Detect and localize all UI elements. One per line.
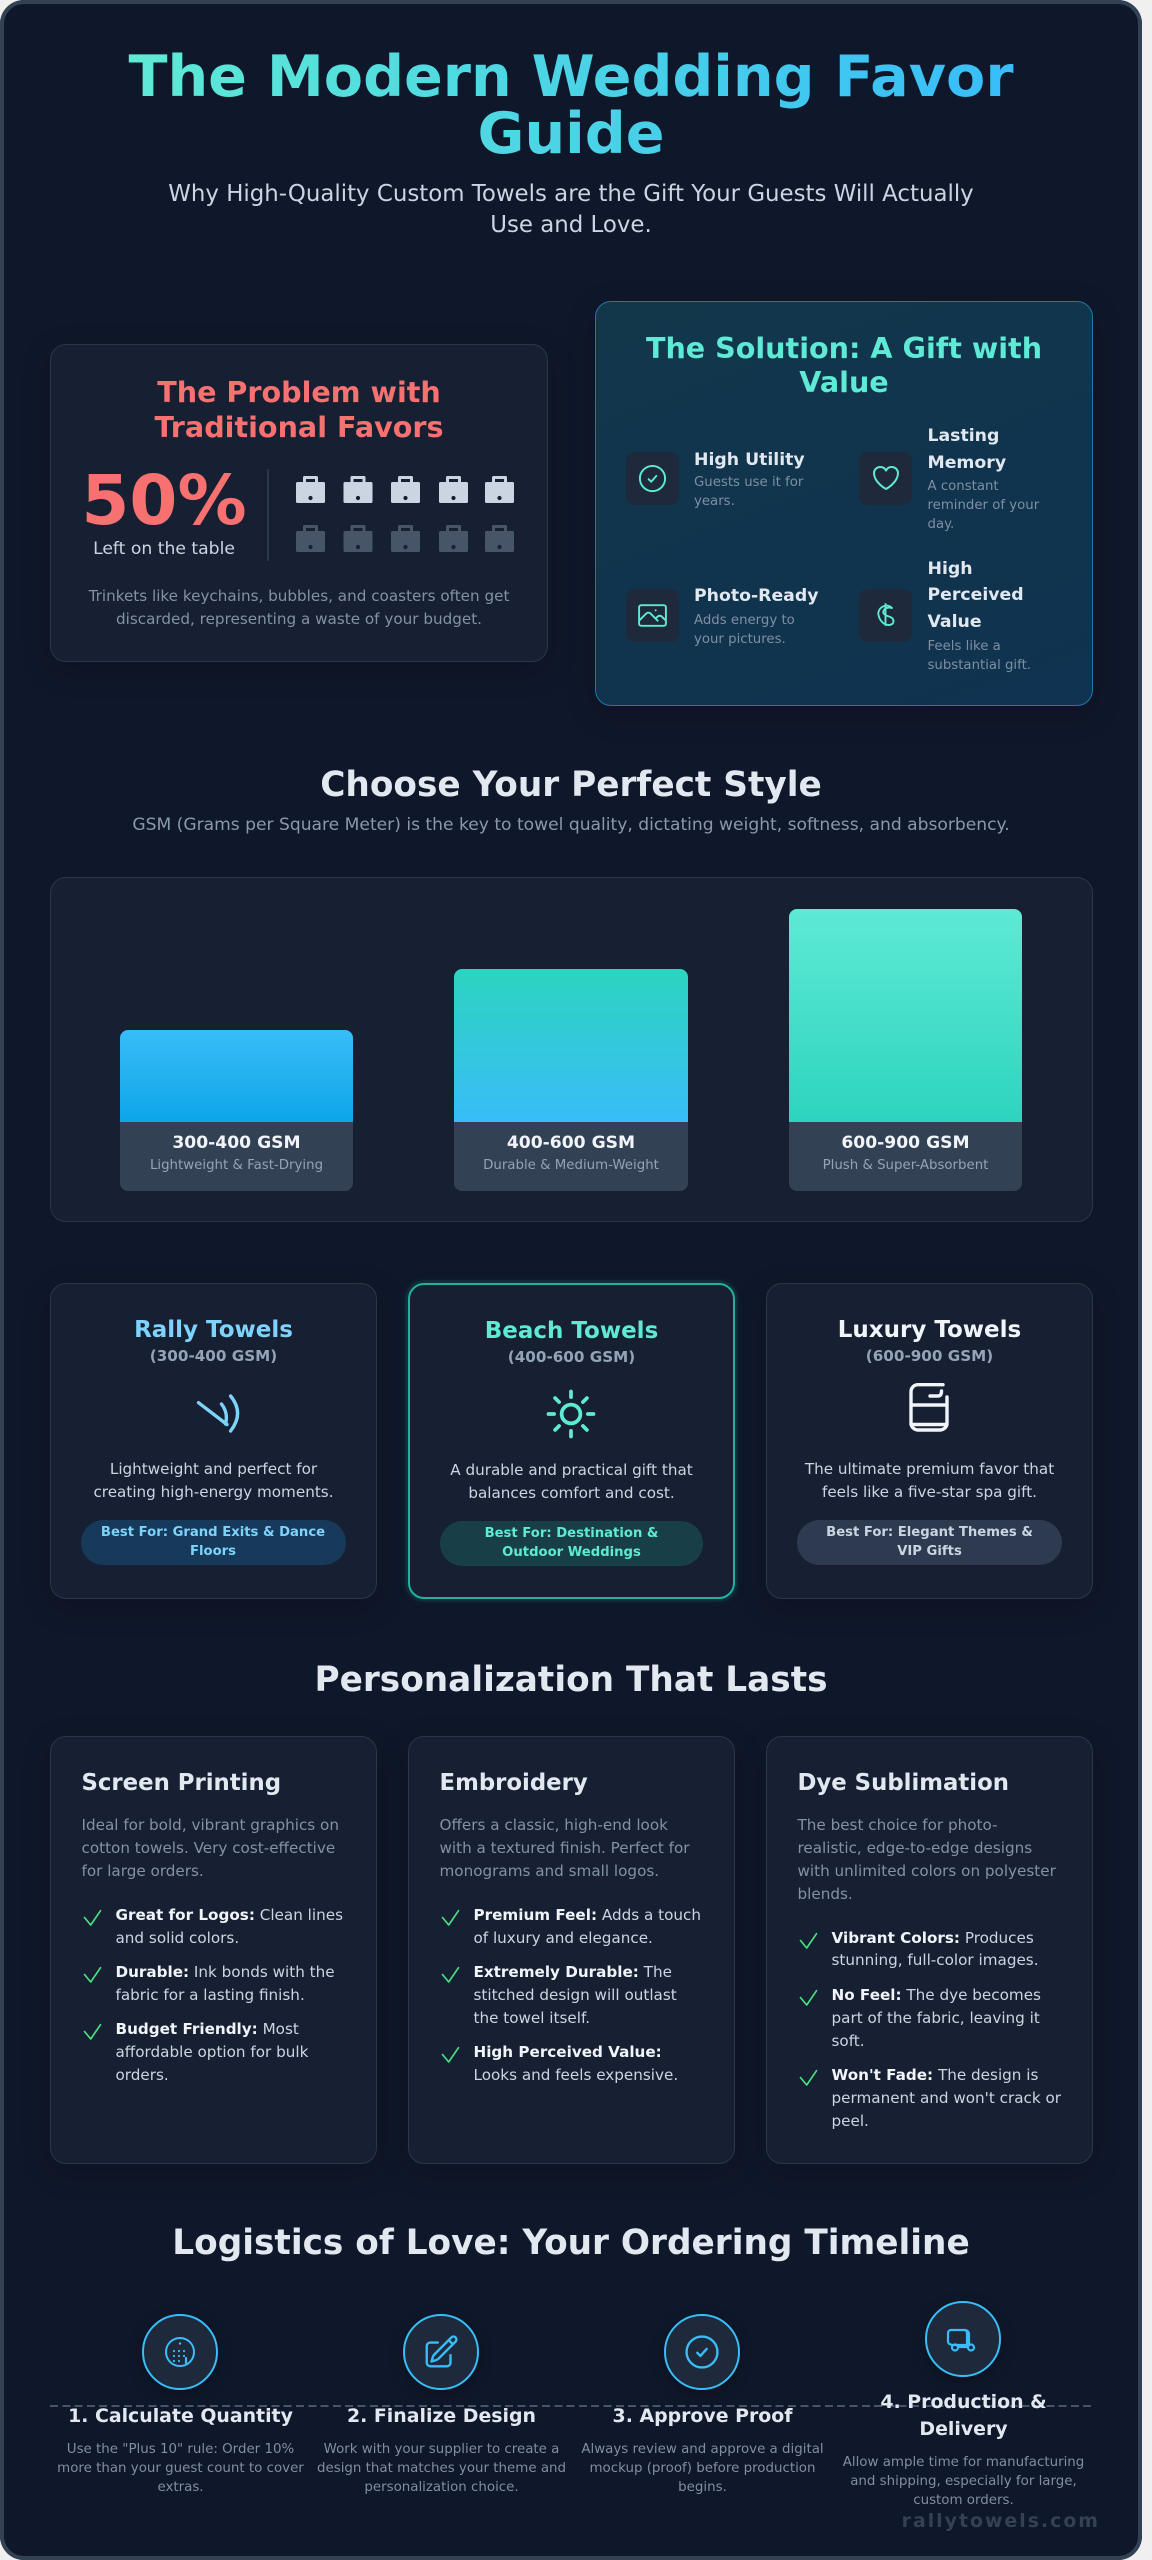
method description: Offers a classic, high-end look (440, 1816, 668, 1834)
benefit: high perceived value: High (928, 559, 973, 579)
step description (311, 2440, 572, 2497)
benefit: vibrant colors: Vibrant Colors: Produces (832, 1929, 1034, 1947)
icon: check (442, 1966, 460, 1983)
solution heading: The Solution: A Gift with (646, 330, 1042, 364)
best-for pill: VIP Gifts (897, 1544, 962, 1559)
benefit: photo ready: Adds energy to (694, 613, 795, 628)
benefit: budget friendly (116, 2020, 308, 2084)
panel: embroidery (408, 1736, 735, 2164)
title: Guide (478, 101, 664, 167)
benefit: high perceived value: Looks and feels expensive. (474, 2066, 678, 2084)
benefit: photo ready: your pictures. (694, 632, 786, 647)
section subheading: GSM (Grams per Square Meter) is the key to towel quality, dictating weight, softness, and absorbency. (132, 815, 1010, 835)
step description: Always review and approve a digital (581, 2442, 824, 2457)
benefit: won't fade (832, 2066, 1061, 2130)
description: A durable and practical gift that (450, 1461, 693, 1479)
panel: beach towels (highlighted) (408, 1283, 735, 1599)
section heading: logistics timeline: Logistics of Love: Your Ordering Timeline (172, 2223, 970, 2263)
benefit: lasting memory: A constant (928, 479, 999, 494)
icon: check (800, 1932, 818, 1949)
step 3: approve proof (572, 2314, 833, 2504)
benefit: no feel: No Feel: The dye becomes (832, 1986, 1041, 2004)
problem description (88, 587, 510, 628)
method description: with unlimited colors on polyester (798, 1862, 1056, 1880)
bar label (120, 1122, 353, 1191)
icon: folded towel (909, 1383, 949, 1432)
card title: Luxury Towels (838, 1316, 1021, 1342)
subtitle: Why High-Quality Custom Towels are the Gift Your Guests Will Actually (168, 181, 974, 207)
benefit: budget friendly: orders. (116, 2066, 169, 2084)
best-for pill: Outdoor Weddings (502, 1545, 641, 1560)
bar fill (454, 969, 688, 1122)
step 2: finalize design (311, 2314, 572, 2504)
bar label: Lightweight & Fast-Drying (150, 1158, 323, 1173)
icon: calculator dial (142, 2314, 218, 2390)
description: balances comfort and cost. (468, 1484, 675, 1502)
benefit: high utility: years. (694, 494, 735, 509)
icon: photo ready (626, 589, 679, 642)
benefit: extremely durable: stitched design will outlast (474, 1986, 677, 2004)
benefit: durable: Durable: Ink bonds with the (116, 1963, 335, 1981)
step description: extras. (157, 2480, 204, 2495)
method description: realistic, edge-to-edge designs (798, 1839, 1032, 1857)
step description: begins. (678, 2480, 727, 2495)
title (50, 49, 1092, 164)
problem heading: The Problem with (157, 375, 441, 409)
benefit: no feel: part of the fabric, leaving it (832, 2009, 1040, 2027)
benefit: high perceived value: Perceived (928, 585, 1024, 605)
bar chart: GSM comparison (50, 877, 1093, 1222)
GSM range: (300-400 GSM) (150, 1347, 277, 1365)
method description: with a textured finish. Perfect for (440, 1839, 690, 1857)
icon: delivery truck (925, 2301, 1001, 2377)
step description: Allow ample time for manufacturing (843, 2455, 1084, 2470)
benefit: budget friendly: Budget Friendly: Most (116, 2020, 299, 2038)
benefit: great for logos: and solid colors. (116, 1929, 239, 1947)
step 1: calculate quantity (57, 2314, 304, 2495)
method description: Ideal for bold, vibrant graphics on (82, 1816, 339, 1834)
description: creating high-energy moments. (93, 1483, 334, 1501)
method title: Embroidery (440, 1770, 588, 1796)
icon: pencil (403, 2314, 479, 2390)
benefit: lasting memory (928, 426, 1040, 532)
bar label (454, 1122, 688, 1191)
panel: luxury towels (766, 1283, 1093, 1599)
icon: rally wave (196, 1394, 240, 1433)
GSM range: (400-600 GSM) (508, 1348, 635, 1366)
panel: the solution (595, 301, 1093, 706)
benefit: vibrant colors: stunning, full-color images. (832, 1951, 1039, 1969)
card title: Beach Towels (485, 1318, 658, 1344)
solution heading (646, 330, 1042, 399)
problem heading: Traditional Favors (154, 410, 444, 444)
benefit: high utility: Guests use it for (694, 475, 803, 490)
method description: The best choice for photo- (798, 1816, 998, 1834)
benefit: extremely durable: Extremely Durable: The (474, 1963, 672, 1981)
icon: check (84, 1910, 102, 1926)
step description: and shipping, especially for large, (850, 2474, 1077, 2489)
bar fill (789, 909, 1022, 1122)
panel: dye sublimation (766, 1736, 1093, 2164)
step description: Use the "Plus 10" rule: Order 10% (67, 2442, 294, 2457)
step title: 3. Approve Proof (613, 2405, 792, 2427)
benefit: won't fade: permanent and won't crack or (832, 2089, 1061, 2107)
method description: monograms and small logos. (440, 1862, 659, 1880)
icon grid: briefcases (296, 476, 514, 552)
benefit: high perceived value: Feels like a (928, 639, 1001, 654)
benefit: high perceived value: High Perceived Value: (474, 2043, 662, 2061)
method description (797, 1816, 1056, 1903)
method description (82, 1816, 339, 1880)
statistic 50%: 50% (81, 461, 247, 541)
benefit: budget friendly: affordable option for bulk (116, 2043, 308, 2061)
benefit: great for logos (116, 1906, 343, 1947)
best-for pill (440, 1521, 703, 1566)
bar: 400-600 GSM (454, 969, 688, 1191)
benefit: durable (116, 1963, 335, 2004)
benefit: lasting memory: Lasting (928, 426, 999, 446)
divider (267, 469, 269, 561)
step description (833, 2453, 1094, 2510)
step title: Delivery (919, 2418, 1008, 2440)
benefit: high perceived value: substantial gift. (928, 658, 1031, 673)
benefit: high utility (694, 450, 805, 509)
method description: cotton towels. Very cost-effective (82, 1839, 335, 1857)
step description (572, 2440, 833, 2497)
step title: 1. Calculate Quantity (68, 2405, 293, 2427)
panel: rally towels (50, 1283, 377, 1599)
benefit: photo ready: Photo-Ready (694, 586, 818, 606)
bar label: Plush & Super-Absorbent (823, 1158, 988, 1173)
panel: the problem (50, 344, 548, 662)
statistic caption: Left on the table (93, 539, 235, 559)
benefit: high utility: High Utility (694, 450, 805, 470)
best-for pill (797, 1520, 1062, 1565)
bar fill (120, 1030, 353, 1122)
icon: check (800, 1990, 818, 2006)
icon: check (800, 2070, 818, 2086)
subtitle (168, 181, 974, 238)
icon: sun (546, 1390, 596, 1438)
icon: check (84, 2024, 102, 2040)
description: feels like a five-star spa gift. (822, 1483, 1037, 1501)
icon: high utility (626, 452, 679, 505)
benefit: high perceived value (928, 559, 1031, 673)
best-for pill: Best For: Elegant Themes & (826, 1525, 1033, 1540)
step description: design that matches your theme and (317, 2461, 566, 2476)
step description: Work with your supplier to create a (324, 2442, 559, 2457)
step description: mockup (proof) before production (590, 2461, 815, 2476)
description (804, 1460, 1054, 1501)
method description: for large orders. (82, 1862, 204, 1880)
bar: 300-400 GSM (120, 1030, 353, 1191)
step description: custom orders. (913, 2493, 1014, 2508)
bar: 600-900 GSM (789, 909, 1022, 1191)
bar label: 300-400 GSM (172, 1132, 301, 1152)
icon: check circle (664, 2314, 740, 2390)
icon: high perceived value (859, 589, 912, 642)
section heading: personalization: Personalization That Lasts (314, 1660, 828, 1700)
problem heading (154, 375, 444, 444)
problem description: discarded, representing a waste of your budget. (116, 610, 482, 628)
benefit: premium feel: Premium Feel: Adds a touch (474, 1906, 701, 1924)
benefit: high perceived value: Value (928, 612, 982, 632)
step description: personalization choice. (364, 2480, 519, 2495)
section heading: choose your style: Choose Your Perfect Style (320, 765, 822, 805)
bar label: 600-900 GSM (841, 1132, 970, 1152)
icon: check (442, 2046, 460, 2063)
step title (833, 2389, 1094, 2443)
title: The Modern Wedding Favor (128, 44, 1014, 110)
benefit: vibrant colors (832, 1929, 1039, 1969)
watermark: rallytowels.com (902, 2510, 1100, 2532)
step description (50, 2440, 311, 2497)
description (93, 1460, 334, 1501)
step description: more than your guest count to cover (57, 2461, 304, 2476)
GSM range: (600-900 GSM) (866, 1347, 993, 1365)
benefit: durable: fabric for a lasting finish. (116, 1986, 305, 2004)
method description (440, 1816, 690, 1880)
benefit: extremely durable (474, 1963, 677, 2027)
benefit: photo ready (694, 586, 818, 647)
icon: check (84, 1966, 102, 1983)
panel: screen printing (50, 1736, 377, 2164)
benefit: won't fade: peel. (832, 2112, 869, 2130)
description (450, 1461, 693, 1502)
step title: 2. Finalize Design (347, 2405, 536, 2427)
method title: Dye Sublimation (798, 1770, 1009, 1796)
benefit: lasting memory: Memory (928, 453, 1006, 473)
best-for pill: Floors (190, 1544, 236, 1559)
icon: check (442, 1910, 460, 1926)
icon: lasting memory (859, 452, 912, 505)
benefit: extremely durable: the towel itself. (474, 2009, 590, 2027)
subtitle: Use and Love. (490, 212, 652, 238)
benefit: lasting memory: reminder of your (928, 498, 1039, 513)
benefit: premium feel (474, 1906, 701, 1947)
best-for pill: Best For: Grand Exits & Dance (101, 1525, 325, 1540)
timeline dashed line (50, 2405, 1093, 2407)
benefit: great for logos: Great for Logos: Clean lines (116, 1906, 343, 1924)
bar label (789, 1122, 1022, 1191)
description: Lightweight and perfect for (110, 1460, 317, 1478)
method title: Screen Printing (82, 1770, 281, 1796)
step title: 4. Production & (880, 2391, 1047, 2413)
method description: blends. (798, 1885, 853, 1903)
best-for pill: Best For: Destination & (485, 1526, 658, 1541)
benefit: no feel (832, 1986, 1041, 2050)
bar label: 400-600 GSM (507, 1132, 635, 1152)
benefit: no feel: soft. (832, 2032, 865, 2050)
card title: Rally Towels (134, 1316, 293, 1342)
solution heading: Value (799, 365, 889, 399)
best-for pill (80, 1520, 346, 1565)
benefit: won't fade: Won't Fade: The design is (832, 2066, 1038, 2084)
description: The ultimate premium favor that (805, 1460, 1054, 1478)
problem description: Trinkets like keychains, bubbles, and coasters often get (89, 587, 509, 605)
benefit: lasting memory: day. (928, 517, 954, 532)
benefit: high perceived value (474, 2043, 678, 2084)
step 4: production and delivery (833, 2301, 1094, 2516)
benefit: premium feel: of luxury and elegance. (474, 1929, 653, 1947)
bar label: Durable & Medium-Weight (483, 1158, 659, 1173)
